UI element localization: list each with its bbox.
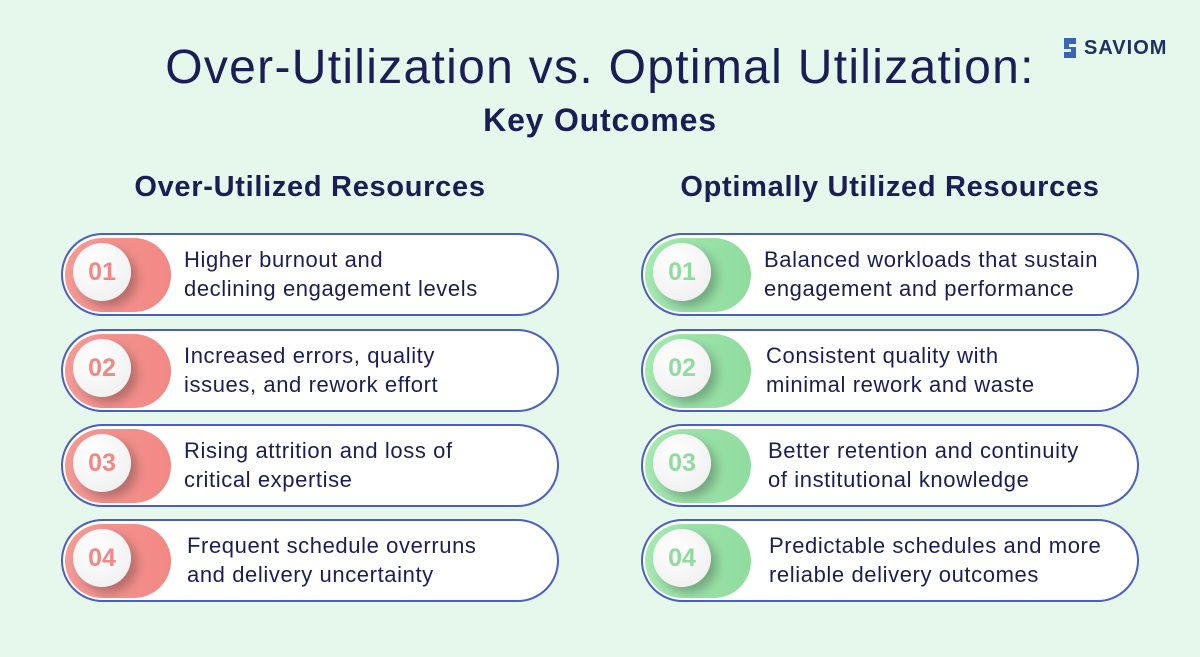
card 01	[641, 233, 1139, 316]
card 03: Better retention and continuity	[768, 438, 1079, 463]
card 03: 03	[668, 449, 696, 477]
logo: SAVIOM	[1084, 37, 1167, 59]
card 03: critical expertise	[184, 467, 353, 492]
card 03: 03	[88, 449, 116, 477]
title: Over-Utilization vs. Optimal Utilization:	[165, 41, 1035, 94]
card 04: Predictable schedules and more	[769, 533, 1101, 558]
subtitle: Key Outcomes	[483, 102, 717, 138]
card 01: 01	[88, 258, 116, 286]
card 03	[641, 424, 1139, 507]
card 03: Rising attrition and loss of	[184, 438, 453, 463]
card 02	[641, 329, 1139, 412]
card 03	[61, 424, 559, 507]
card 01: declining engagement levels	[184, 276, 478, 301]
card 04: 04	[88, 544, 116, 572]
card 04	[641, 519, 1139, 602]
card 02: Increased errors, quality	[184, 343, 435, 368]
card 01: Higher burnout and	[184, 247, 383, 272]
card 02	[61, 329, 559, 412]
card 04: reliable delivery outcomes	[769, 562, 1039, 587]
heading: optimal: Optimally Utilized Resources	[680, 171, 1100, 203]
panel: over-utilized list	[61, 233, 559, 602]
card 04: and delivery uncertainty	[187, 562, 434, 587]
card 04	[61, 519, 559, 602]
card 01	[61, 233, 559, 316]
card 04: 04	[668, 544, 696, 572]
card 02: Consistent quality with	[766, 343, 999, 368]
card 02: minimal rework and waste	[766, 372, 1035, 397]
card 02: 02	[88, 354, 116, 382]
card 02: 02	[668, 354, 696, 382]
card 02: issues, and rework effort	[184, 372, 438, 397]
card 01: 01	[668, 258, 696, 286]
card 01: Balanced workloads that sustain	[764, 247, 1098, 272]
card 01: engagement and performance	[764, 276, 1074, 301]
card 03: of institutional knowledge	[768, 467, 1029, 492]
panel: optimal list	[641, 233, 1139, 602]
card 04: Frequent schedule overruns	[187, 533, 477, 558]
heading: over-utilized: Over-Utilized Resources	[134, 171, 486, 203]
